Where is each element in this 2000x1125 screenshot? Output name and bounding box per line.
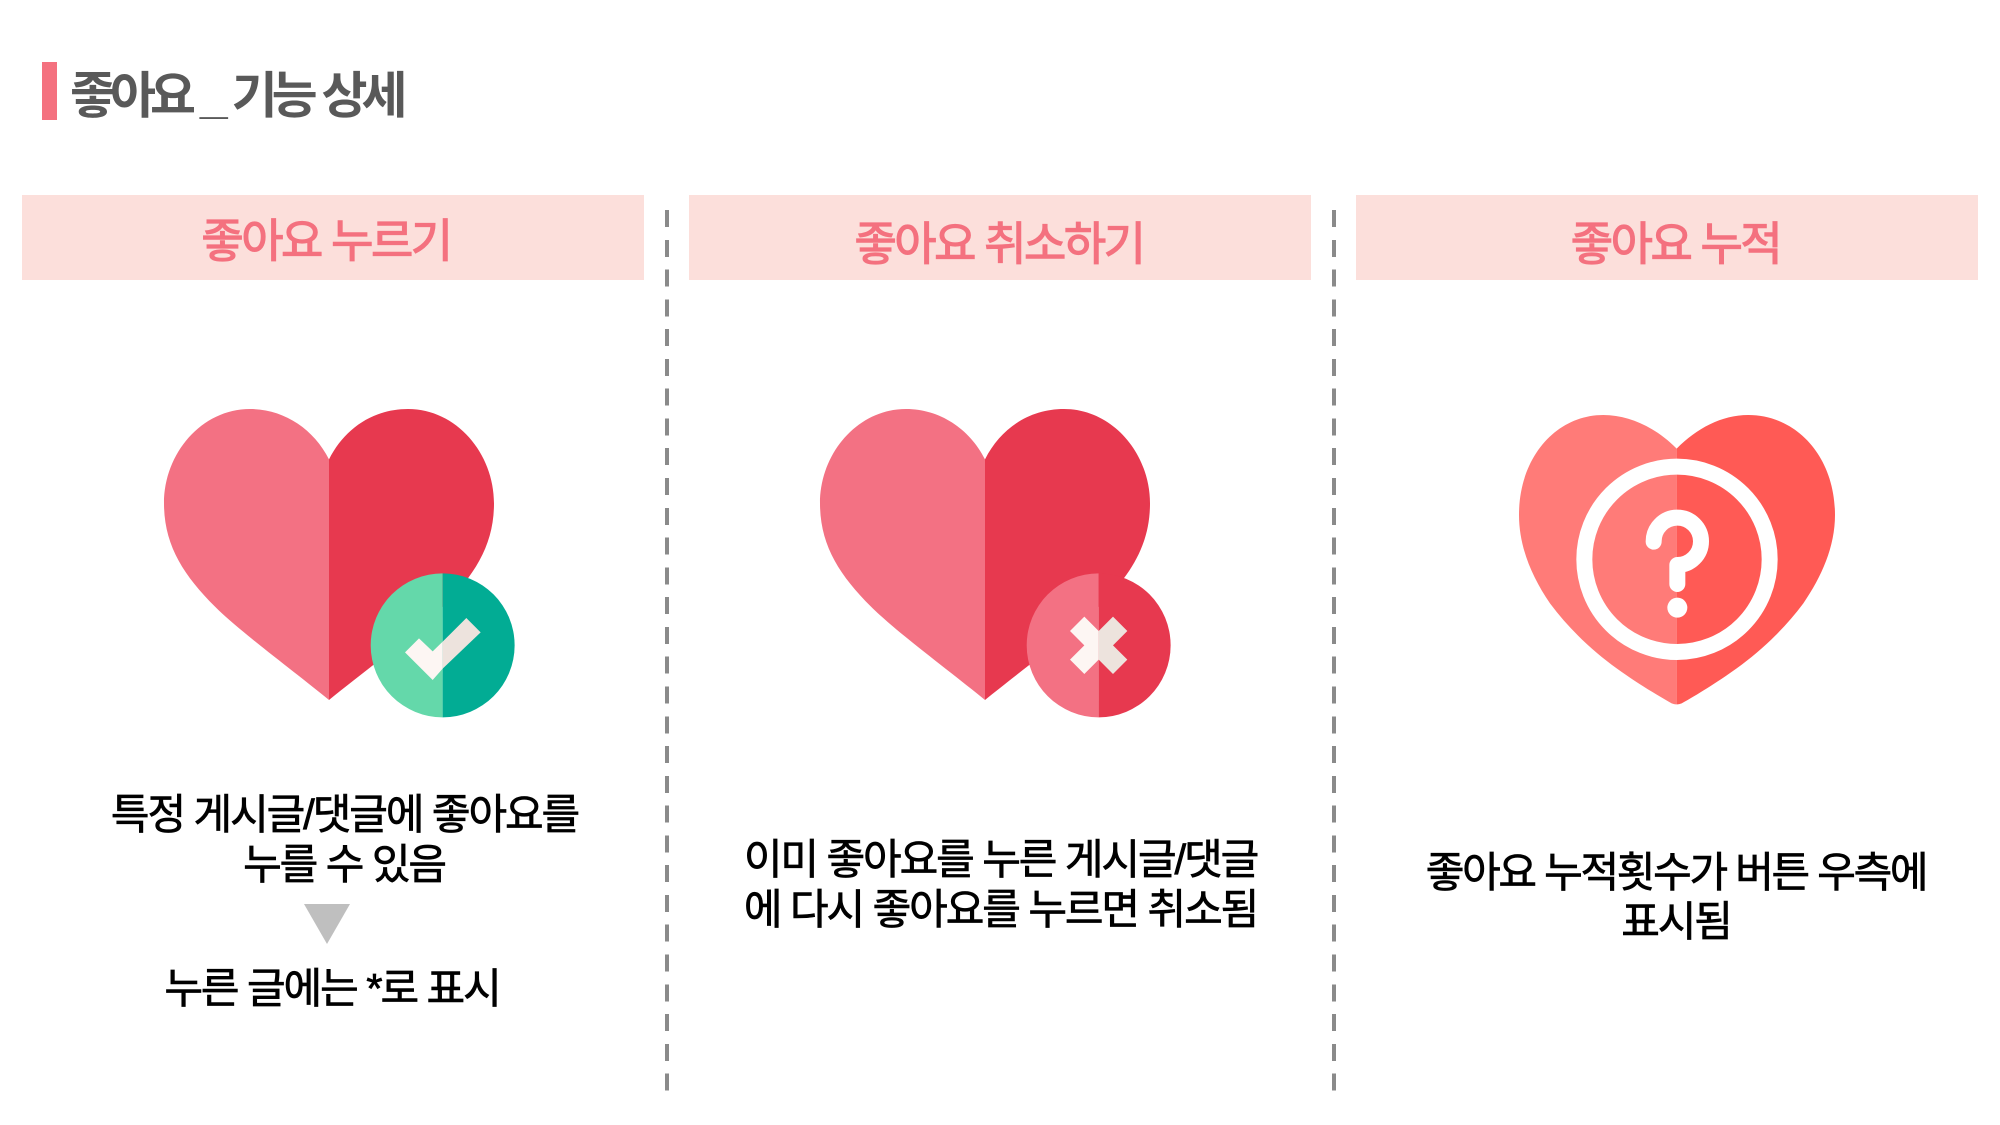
text: cancel like description line 2: 에 다시 좋아요를 누르면 취소됨	[744, 886, 1257, 933]
title accent bar	[42, 62, 57, 120]
text: like count description line 2: 표시됨	[1621, 898, 1731, 945]
heading: like count: 좋아요 누적	[1571, 218, 1780, 270]
divider 2	[1332, 210, 1336, 1090]
text: press like description line 1: 특정 게시글/댓글에 좋아요를	[111, 791, 578, 838]
title: 좋아요 _ 기능 상세	[70, 68, 401, 124]
arrow: down triangle	[304, 904, 350, 944]
heading: cancel like: 좋아요 취소하기	[854, 218, 1144, 270]
divider 1	[665, 210, 669, 1090]
heading box: cancel like	[689, 195, 1311, 280]
heading: press like: 좋아요 누르기	[201, 215, 451, 267]
heading box: press like	[22, 195, 644, 280]
icon: heart with check	[164, 409, 515, 718]
text: cancel like description line 1: 이미 좋아요를 누른 게시글/댓글	[744, 836, 1257, 883]
text: press like description line 2: 누를 수 있음	[243, 841, 445, 888]
text: like count description line 1: 좋아요 누적횟수가 버튼 우측에	[1426, 849, 1926, 896]
text: press like result: 누른 글에는 *로 표시	[164, 965, 500, 1012]
icon: heart with cross	[820, 409, 1171, 718]
heading box: like count	[1356, 195, 1978, 280]
icon: heart with question mark	[1519, 415, 1835, 704]
